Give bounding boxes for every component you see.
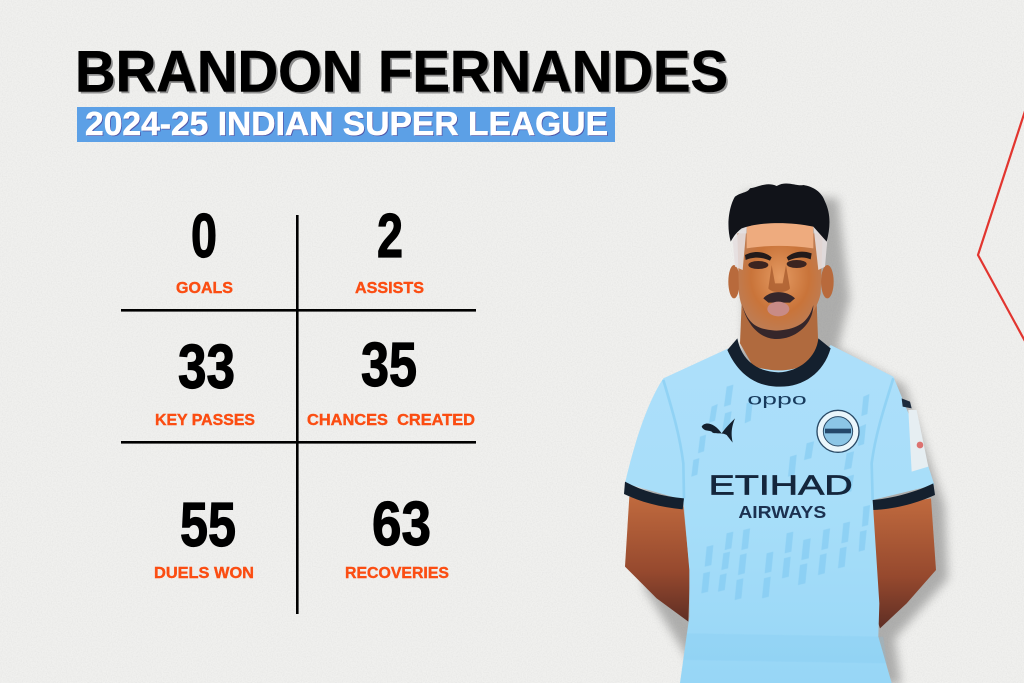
forehead highlight <box>747 222 813 248</box>
lips <box>767 302 789 316</box>
subtitle banner: 2024-25 INDIAN SUPER LEAGUE <box>85 105 608 142</box>
stat: key passes: 33 <box>178 333 235 402</box>
stat: assists: 2 <box>377 202 403 271</box>
beard <box>742 292 813 339</box>
title: BRANDON FERNANDES <box>75 40 728 104</box>
stat: goals: GOALS <box>176 280 233 297</box>
collar <box>727 338 831 387</box>
nose <box>768 265 790 292</box>
sleeve seams <box>663 378 893 500</box>
stat: recoveries: 63 <box>372 490 431 559</box>
sleeve patch <box>902 398 928 472</box>
face <box>737 233 823 338</box>
sleeve cuffs <box>624 482 935 510</box>
stat grid lines <box>121 215 476 614</box>
stat: duels won: DUELS WON <box>154 565 254 582</box>
stat: recoveries <box>345 490 449 582</box>
eyes and brows <box>745 252 812 269</box>
stat: duels won <box>154 491 254 582</box>
stat: goals <box>176 202 233 297</box>
stat: key passes <box>155 333 255 429</box>
player shadow <box>641 192 948 683</box>
brand: airways: AIRWAYS <box>738 502 826 522</box>
stat: chances created: 35 <box>361 331 417 400</box>
stat: key passes: KEY PASSES <box>155 412 255 429</box>
brand: oppo: oppo <box>747 391 807 408</box>
stat: chances created: CHANCES CREATED <box>307 412 475 429</box>
subtitle banner: 2024-25 INDIAN SUPER LEAGUE <box>86 106 609 143</box>
shirt <box>625 345 934 683</box>
stat: goals: 0 <box>191 202 217 271</box>
stat: assists <box>355 202 424 297</box>
player photo illustration <box>624 183 948 683</box>
icon: puma logo <box>702 418 735 443</box>
stat: recoveries: RECOVERIES <box>345 565 449 582</box>
shirt pattern <box>683 385 887 663</box>
stat: assists: ASSISTS <box>355 280 424 297</box>
arms <box>625 497 936 628</box>
icon: club crest <box>817 410 859 452</box>
temple fade <box>733 225 827 270</box>
brand: etihad: ETIHAD <box>709 470 853 501</box>
red angular line <box>978 108 1024 343</box>
neck <box>740 303 818 374</box>
title: BRANDON FERNANDES <box>77 42 730 106</box>
stat: duels won: 55 <box>180 491 236 560</box>
ears <box>728 265 834 298</box>
hair <box>728 183 829 242</box>
stat: chances created <box>307 331 475 429</box>
